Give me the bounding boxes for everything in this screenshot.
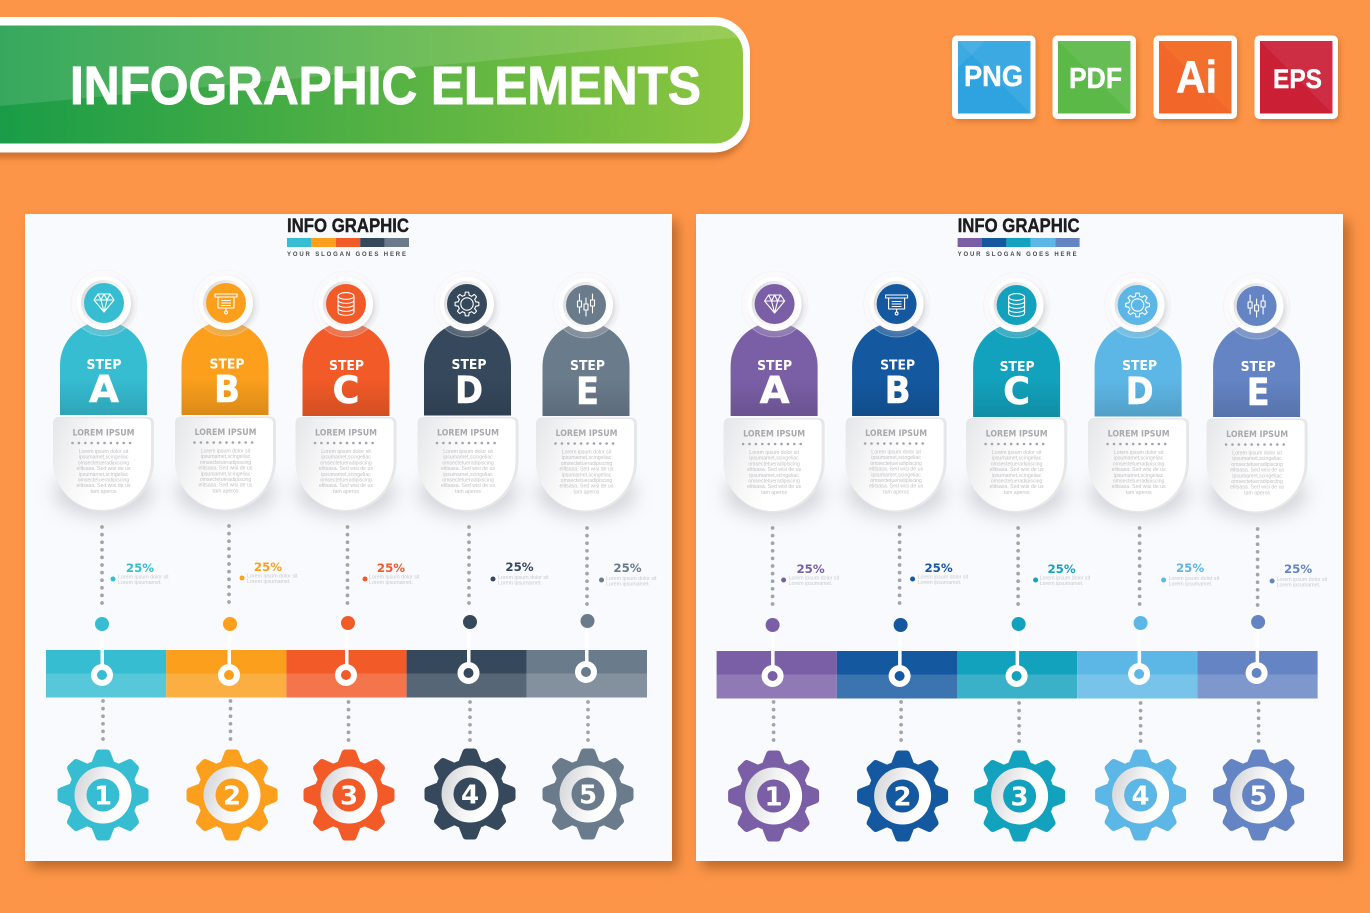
connector: step B [218,526,240,740]
card: step D text: ipsumamet,scingeliac [1114,456,1164,462]
card: step C text [296,417,396,517]
connector: step C [335,527,357,741]
tab: step D: STEP [452,357,487,373]
heading: INFO GRAPHIC [287,215,409,237]
card: step A text: ipsumamet,scingeliac [79,455,129,461]
card: step B text: elitsasa. Sed wisi de us [869,467,923,473]
gear: 4: 4 [461,780,479,810]
card: step D text: Lorem ipsum dolor sit [1114,450,1164,456]
card: step B text: elitsasa. Sed wisi de us [199,466,253,472]
card: step C text [966,418,1067,518]
title: INFOGRAPHIC ELEMENTS [70,56,701,116]
percent: step D: Lorem ipsumamet. [1169,582,1212,588]
badge: EPS [1254,36,1340,122]
card: step A text: Lorem ipsum dolor sit [79,449,129,455]
connector: step D [458,527,480,741]
panel: left infographic [25,214,678,868]
card: step D text: omsectetueradipiscing [442,478,494,484]
percent: step A: Lorem ipsumamet. [789,581,832,587]
step E column [536,272,657,840]
tab: step C [973,324,1060,417]
card: step A text: LOREM IPSUM [72,428,134,438]
card: step A text: ipsumamet,scingeliac [79,472,129,478]
card: step E text: tam aperos [574,489,600,495]
percent: step E: Lorem ipsumamet. [606,582,650,588]
card: step D text: elitsasa. Sed wisi de us [1112,467,1166,473]
percent: step A: 25% [126,561,154,575]
percent: step C: 25% [1047,562,1076,576]
panel: right infographic [696,214,1349,868]
gear: 3: 3 [340,782,358,812]
gear: 2 [186,750,278,840]
card: step E text [1207,418,1308,518]
card: step E text: omsectetueradipiscing [561,461,612,467]
card: step D text: tam aperos [455,489,481,495]
percent: step C: 25% [377,561,405,575]
connector: step B [889,527,911,741]
card: step D text: LOREM IPSUM [437,428,499,438]
tab: step E [542,322,630,416]
tab: step A: A [760,369,790,412]
card: step E text: omsectetueradipiscing [1231,462,1283,468]
card: step A text: elitsasa. Sed wisi de us [77,466,131,472]
gear: 4 [424,748,516,840]
badge: Ai [1154,36,1239,122]
card: step E text: LOREM IPSUM [1226,429,1288,440]
percent: step D: Lorem ipsumamet. [498,580,542,586]
percent: step B: Lorem ipsum dolor sit [918,574,969,580]
card: step E text: elitsasa. Sed wisi de us [560,484,614,490]
percent: step E: 25% [1284,562,1312,576]
heading [287,215,409,258]
connector: step D [1128,528,1150,742]
percent: step A: Lorem ipsum dolor sit [118,574,169,580]
tab: step E: STEP [570,358,605,374]
percent: step E: Lorem ipsum dolor sit [606,576,657,582]
percent: step E: 25% [613,561,642,575]
card: step A text: LOREM IPSUM [743,428,805,440]
step C column [296,271,420,840]
card: step D text [1088,418,1189,518]
tab: step C: C [332,369,360,412]
card: step D text [418,417,518,517]
badge: PDF [1052,36,1138,122]
card: step E text: elitsasa. Sed wisi de us [560,467,614,473]
percent: step E: Lorem ipsumamet. [1277,582,1320,588]
card: step B text: LOREM IPSUM [194,427,256,438]
percent: step C: Lorem ipsumamet. [1040,581,1083,587]
timeline band [46,650,647,698]
tab: step C: C [1003,370,1030,413]
tab: step D [424,322,511,416]
percent: step B: Lorem ipsumamet. [918,580,961,586]
percent: step C: Lorem ipsum dolor sit [369,574,420,580]
step B column [846,271,969,842]
percent: step C [362,561,420,586]
card: step D text: omsectetueradipiscing [442,460,494,466]
tab: step D: STEP [1122,358,1157,374]
tab: step A: STEP [757,358,792,374]
format badges [952,36,1340,122]
card: step B text: ipsumamet,scingeliac [201,471,251,477]
card: step D text: ipsumamet,scingeliac [1114,473,1164,479]
gear: 2: 2 [223,782,241,812]
percent: step E [599,561,657,588]
step C column [966,272,1091,842]
step A column [724,271,840,842]
tab: step A: A [89,368,119,411]
gear: 5 [542,748,634,840]
badge: EPS: EPS [1273,64,1322,94]
heading [958,215,1080,258]
tab: step D [1095,323,1182,416]
tab: step B: STEP [210,356,245,372]
card: step C text: ipsumamet,scingeliac [321,472,371,478]
percent: step E [1270,562,1328,588]
card: step E text: elitsasa. Sed wisi de us [1230,468,1284,474]
percent: step D: 25% [505,560,534,574]
step D column [418,271,549,840]
gear: 5: 5 [579,780,597,810]
card: step C text: LOREM IPSUM [986,428,1048,440]
tab: step B: B [214,368,240,411]
icon: settings gear [434,271,500,337]
tab: step D: D [1126,370,1154,413]
card: step A text: Lorem ipsum dolor sit [749,450,799,456]
card: step B text: tam aperos [883,489,909,495]
card: step A text: omsectetueradipiscing [748,478,800,484]
tab: step B [182,322,268,415]
percent: step E: Lorem ipsum dolor sit [1277,577,1328,583]
tab: step A [60,322,147,415]
card: step D text: Lorem ipsum dolor sit [443,449,493,455]
percent: step D: Lorem ipsum dolor sit [1169,576,1220,582]
card: step C text: omsectetueradipiscing [991,478,1043,484]
card: step B text: omsectetueradipiscing [870,461,922,467]
card: step C text: elitsasa. Sed wisi de us [319,483,373,489]
percent: step A: 25% [796,562,825,576]
card: step A text [53,417,154,517]
card: step C text: tam aperos [333,489,359,495]
card: step C text: elitsasa. Sed wisi de us [990,467,1044,473]
gear: 5 [1213,750,1304,840]
percent: step B: 25% [924,561,953,575]
heading: YOUR SLOGAN GOES HERE [287,252,406,258]
icon: sliders [1224,273,1290,339]
card: step C text: ipsumamet,scingeliac [321,455,371,461]
percent: step A: Lorem ipsum dolor sit [789,576,840,582]
card: step E text: ipsumamet,scingeliac [562,455,612,461]
card: step C text: omsectetueradipiscing [320,460,372,466]
card: step D text: ipsumamet,scingeliac [443,455,493,461]
card: step D text: omsectetueradipiscing [1113,478,1165,484]
icon: projector board [864,271,930,337]
card: step A text: elitsasa. Sed wisi de us [747,467,801,473]
badge: PNG [952,36,1037,122]
percent: step C [1033,562,1091,587]
card: step A text: ipsumamet,scingeliac [749,456,799,462]
card: step D text: ipsumamet,scingeliac [443,472,493,478]
card: step E text: ipsumamet,scingeliac [562,472,612,478]
card: step C text: elitsasa. Sed wisi de us [990,484,1044,490]
icon: sliders [553,272,619,338]
card: step B text: Lorem ipsum dolor sit [871,450,921,456]
tab: step E: E [576,370,599,413]
percent: step C: Lorem ipsumamet. [369,580,413,586]
card: step A text: omsectetueradipiscing [78,460,129,466]
percent: step D: Lorem ipsum dolor sit [498,575,549,581]
badge: PDF: PDF [1069,63,1122,95]
card: step B text [175,416,276,516]
timeline band [717,651,1318,698]
card: step B text: Lorem ipsum dolor sit [201,448,251,454]
card: step B text: elitsasa. Sed wisi de us [199,483,253,489]
connector: step C [1006,528,1028,742]
card: step C text: LOREM IPSUM [315,428,377,438]
tab: step D: D [455,369,483,412]
card: step A text [724,418,825,518]
tab: step E [1213,324,1300,417]
tab: step C: STEP [1000,359,1035,375]
card: step E text: tam aperos [1244,490,1270,496]
icon: database coins [984,272,1050,338]
card: step E text: omsectetueradipiscing [1231,479,1283,485]
gear: 3: 3 [1011,782,1029,812]
card: step C text: ipsumamet,scingeliac [992,473,1042,479]
tab: step E: STEP [1241,359,1276,375]
card: step B text: ipsumamet,scingeliac [201,454,251,460]
card: step E text: elitsasa. Sed wisi de us [1230,485,1284,491]
card: step E text [536,418,637,518]
percent: step B: Lorem ipsumamet. [247,579,291,585]
card: step B text [846,418,947,518]
card: step E text: ipsumamet,scingeliac [1232,473,1282,479]
gear: 1: 1 [765,782,783,812]
gear: 2 [857,750,948,842]
tab: step B: B [885,369,911,412]
gear: 1: 1 [94,782,112,812]
card: step C text: tam aperos [1004,490,1030,496]
percent: step D: 25% [1176,561,1204,575]
card: step A text: tam aperos [91,489,117,495]
card: step A text: elitsasa. Sed wisi de us [747,484,801,490]
card: step E text: Lorem ipsum dolor sit [1232,450,1282,456]
header banner [0,17,750,158]
gear: 1 [728,750,819,842]
step B column [175,270,298,840]
percent: step C: Lorem ipsum dolor sit [1040,576,1091,582]
card: step D text: LOREM IPSUM [1108,428,1170,440]
connector: step A [762,528,784,741]
card: step B text: omsectetueradipiscing [200,477,251,483]
connector: step E [575,528,597,741]
connector: step E [1246,529,1268,742]
badge: Ai: Ai [1176,52,1217,102]
step E column [1207,273,1328,840]
percent: step B [240,560,298,585]
icon: diamond [742,271,808,337]
icon: settings gear [1105,272,1171,338]
connector: step A [91,527,113,740]
tab: step C: STEP [329,358,364,374]
card: step B text: elitsasa. Sed wisi de us [869,484,923,490]
card: step C text: omsectetueradipiscing [320,478,372,484]
tab: step C [302,322,390,416]
percent: step D [490,560,549,586]
card: step A text: elitsasa. Sed wisi de us [77,483,131,489]
percent: step B: Lorem ipsum dolor sit [247,574,298,580]
card: step D text: elitsasa. Sed wisi de us [441,483,495,489]
card: step A text: omsectetueradipiscing [748,461,800,467]
card: step B text: omsectetueradipiscing [200,460,251,466]
percent: step A: Lorem ipsumamet. [118,580,162,586]
gear: 1 [58,750,148,840]
gear: 3 [304,750,394,840]
gear: 4 [1095,750,1186,840]
card: step B text: ipsumamet,scingeliac [871,455,921,461]
card: step B text: ipsumamet,scingeliac [871,472,921,478]
heading: INFO GRAPHIC [958,215,1080,237]
gear: 4: 4 [1132,782,1150,812]
tab: step A [731,322,818,416]
card: step E text: omsectetueradipiscing [561,478,612,484]
card: step B text: tam aperos [213,488,239,494]
card: step A text: omsectetueradipiscing [78,478,129,484]
card: step B text: LOREM IPSUM [865,428,927,439]
card: step C text: ipsumamet,scingeliac [992,456,1042,462]
card: step D text: elitsasa. Sed wisi de us [441,466,495,472]
badge: PNG: PNG [964,61,1023,93]
tab: step E: E [1247,371,1270,414]
card: step E text: LOREM IPSUM [556,428,618,439]
card: step A text: ipsumamet,scingeliac [749,473,799,479]
card: step D text: tam aperos [1126,490,1152,496]
step D column [1088,272,1220,840]
card: step C text: Lorem ipsum dolor sit [321,449,371,455]
card: step D text: elitsasa. Sed wisi de us [1112,484,1166,490]
percent: step B [910,561,969,586]
gear: 3 [974,750,1065,842]
percent: step B: 25% [254,560,282,574]
card: step A text: tam aperos [761,490,787,496]
gear: 5: 5 [1250,782,1268,812]
card: step D text: omsectetueradipiscing [1113,461,1165,467]
icon: diamond [71,270,137,336]
card: step E text: Lorem ipsum dolor sit [562,450,612,456]
card: step E text: ipsumamet,scingeliac [1232,456,1282,462]
step A column [53,270,169,840]
tab: step B: STEP [880,358,915,374]
percent: step D [1161,561,1220,588]
tab: step A: STEP [86,357,122,373]
tab: step B [852,322,939,416]
percent: step A [781,562,840,587]
icon: database coins [313,271,379,337]
card: step B text: omsectetueradipiscing [870,478,922,484]
icon: projector board [193,270,259,336]
gear: 2: 2 [894,782,912,812]
card: step C text: Lorem ipsum dolor sit [992,450,1042,456]
card: step C text: omsectetueradipiscing [991,461,1043,467]
percent: step A [110,561,169,586]
card: step C text: elitsasa. Sed wisi de us [319,466,373,472]
heading: YOUR SLOGAN GOES HERE [958,252,1077,258]
